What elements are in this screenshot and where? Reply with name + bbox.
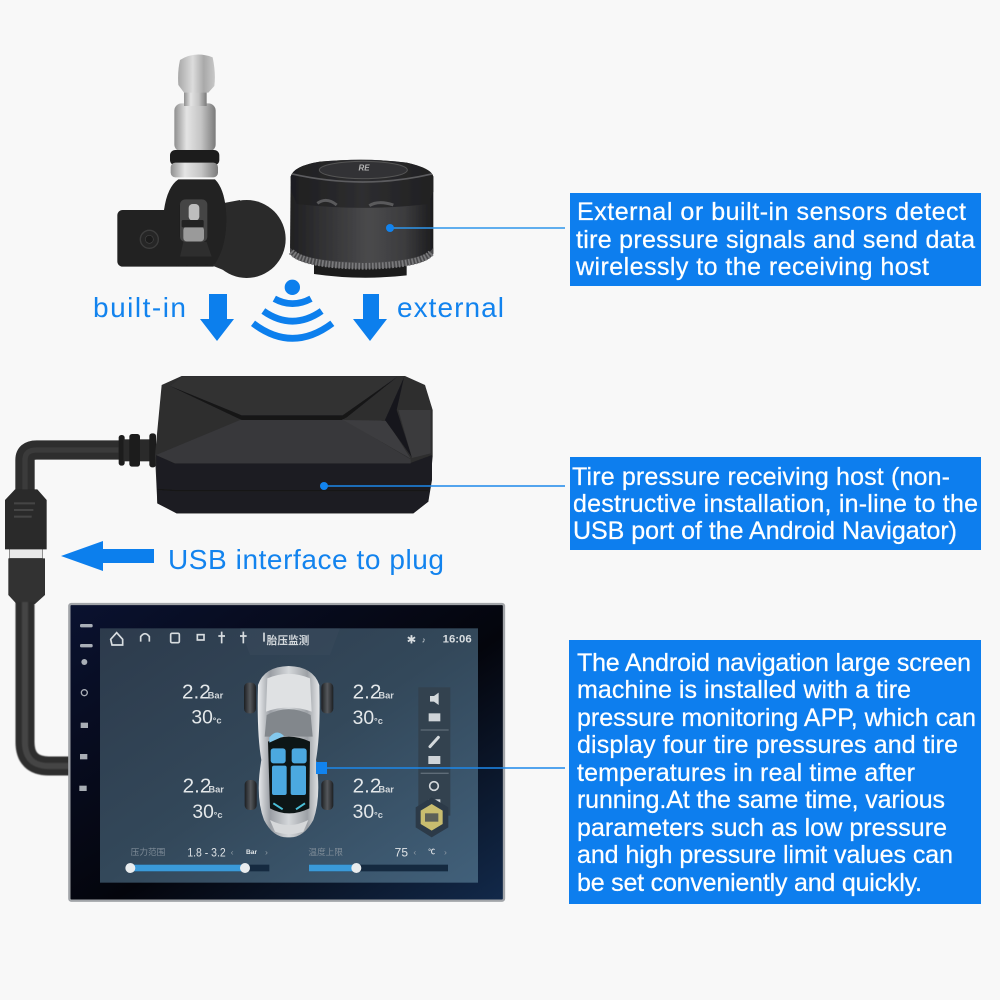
callout: host: Tire pressure receiving host (non- — [572, 463, 950, 491]
sliders: › — [444, 847, 447, 857]
sliders: Bar — [246, 849, 258, 856]
side buttons — [79, 624, 93, 791]
arrow: USB plug — [61, 541, 154, 571]
readout: rear left: 30 — [192, 802, 214, 823]
callout: screen: running.At the same time, various — [577, 786, 945, 814]
sliders — [125, 846, 448, 873]
status glyphs: ✱ — [407, 634, 416, 646]
callout: host: destructive installation, in-line to the — [573, 490, 978, 518]
cable: USB to screen — [25, 602, 70, 766]
clock: 16:06 — [443, 634, 472, 646]
callout: screen: pressure monitoring APP, which can — [577, 704, 976, 732]
readout: front right: Bar — [378, 690, 394, 700]
external cap sensor: RE — [358, 164, 370, 173]
callout: screen: temperatures in real time after — [577, 759, 915, 787]
leader line: host — [320, 482, 565, 490]
callout: host — [570, 457, 981, 550]
readout: front right: °c — [374, 716, 383, 726]
callout: screen — [569, 640, 981, 904]
USB connectors — [5, 489, 47, 604]
side menu — [418, 687, 450, 816]
readout: rear left — [183, 775, 224, 823]
label: USB interface: USB interface to plug — [168, 544, 444, 575]
arrow: built-in down — [200, 294, 234, 341]
top status bar icons — [111, 632, 264, 645]
callout: host: USB port of the Android Navigator) — [573, 517, 957, 545]
bezel — [69, 604, 504, 901]
readout: front left: Bar — [208, 690, 224, 700]
callout: screen: be set conveniently and quickly. — [577, 869, 922, 897]
sliders: ‹ — [413, 847, 416, 857]
navigation screen — [69, 604, 504, 901]
readout: rear right: °c — [374, 810, 383, 820]
label: external: external — [397, 292, 504, 323]
callout: screen: display four tire pressures and tire — [577, 731, 958, 759]
title tab — [240, 628, 340, 655]
readout: front left: 2.2 — [182, 680, 211, 703]
status glyphs — [407, 634, 426, 646]
callout: sensors: External or built-in sensors detect — [577, 198, 966, 226]
readout: rear right: Bar — [378, 785, 394, 795]
callout: sensors — [570, 193, 981, 286]
callout: screen: and high pressure limit values can — [577, 841, 953, 869]
readout: front right: 2.2 — [353, 680, 381, 703]
receiving host — [155, 376, 433, 513]
sliders: 温度上限 — [308, 846, 343, 857]
external cap sensor — [290, 160, 433, 278]
readout: rear left: Bar — [208, 785, 224, 795]
car top view — [244, 666, 333, 837]
sliders: ‹ — [231, 847, 234, 857]
leader line: sensors — [386, 224, 565, 232]
readout: rear right: 30 — [353, 802, 374, 823]
readout: front left: 30 — [191, 707, 213, 728]
readout: rear left: 2.2 — [183, 775, 211, 798]
readout: front left — [182, 680, 224, 728]
sliders: ℃ — [428, 848, 435, 856]
readout: rear right — [353, 775, 394, 823]
readout: front right — [353, 680, 394, 729]
sliders: 压力范围 — [131, 846, 165, 857]
callout: screen: The Android navigation large screen — [577, 649, 971, 677]
arrow: external down — [353, 294, 387, 341]
callout: sensors: wirelessly to the receiving host — [575, 253, 929, 281]
cable: host to USB — [25, 433, 156, 493]
status glyphs: ♪ — [422, 636, 426, 645]
readout: front left: °c — [213, 715, 222, 725]
hex badge — [416, 797, 448, 837]
built-in valve sensor — [117, 55, 286, 278]
sliders: 1.8 - 3.2 — [187, 846, 226, 860]
callout: screen: parameters such as low pressure — [577, 814, 947, 842]
sliders: › — [265, 847, 268, 857]
callout: screen: machine is installed with a tire — [577, 676, 911, 704]
readout: rear left: °c — [214, 810, 223, 820]
leader line: screen — [316, 762, 565, 774]
icon: wireless signal — [253, 280, 332, 338]
callout: sensors: tire pressure signals and send data — [576, 226, 975, 254]
readout: rear right: 2.2 — [353, 775, 381, 798]
label: built-in: built-in — [93, 292, 186, 323]
sliders: 75 — [395, 846, 408, 860]
screen title: 胎压监测 — [267, 634, 309, 647]
readout: front right: 30 — [353, 708, 374, 729]
display — [100, 628, 478, 883]
